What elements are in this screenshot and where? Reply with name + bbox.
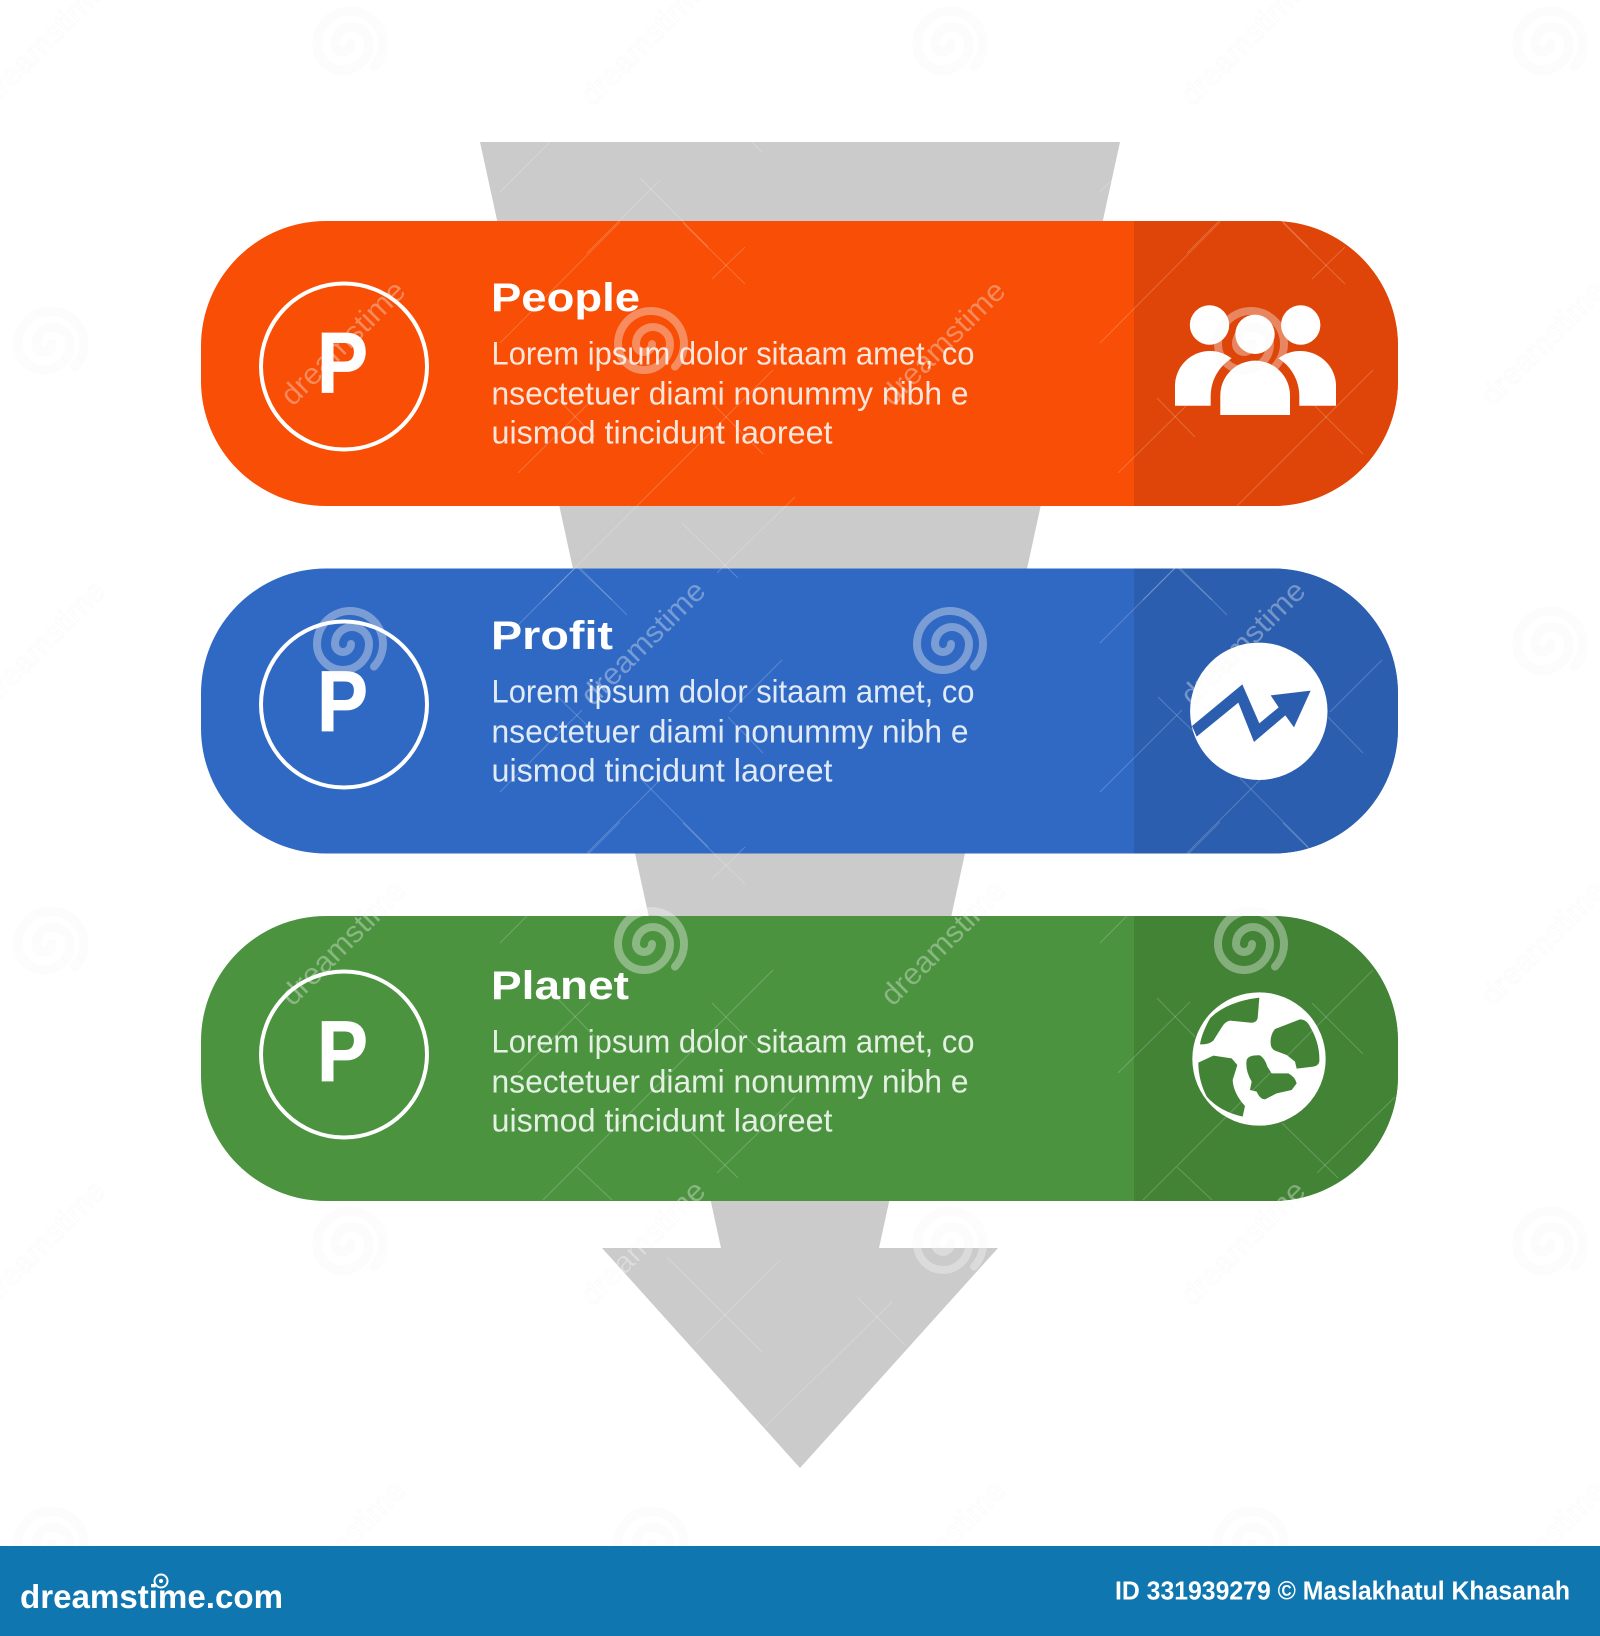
planet letter badge bbox=[261, 972, 427, 1138]
footer logo: dreamstime.com bbox=[20, 1578, 283, 1615]
panel: people bbox=[201, 221, 1398, 506]
icon: growth chart arrow bbox=[1190, 643, 1328, 780]
profit bar dark end bbox=[1134, 568, 1398, 854]
profit body text: uismod tincidunt laoreet bbox=[492, 753, 833, 789]
planet body text bbox=[492, 1024, 974, 1139]
profit body text: Lorem ipsum dolor sitaam amet, co bbox=[492, 674, 974, 710]
people bar background bbox=[201, 221, 1398, 506]
planet bar background bbox=[201, 916, 1398, 1201]
people bar dark end bbox=[1134, 221, 1398, 506]
people body text bbox=[492, 336, 974, 451]
watermark text: dreamstime bbox=[274, 874, 412, 1012]
icon: globe bbox=[1192, 992, 1326, 1126]
watermark text: dreamstime bbox=[874, 874, 1012, 1012]
profit bar background bbox=[201, 568, 1398, 854]
footer credit: ID 331939279 © Maslakhatul Khasanah bbox=[1115, 1577, 1570, 1605]
people body text: uismod tincidunt laoreet bbox=[492, 415, 833, 451]
people letter badge: P bbox=[317, 316, 368, 412]
people body text: Lorem ipsum dolor sitaam amet, co bbox=[492, 336, 974, 372]
panel: planet bbox=[201, 916, 1398, 1201]
planet body text: uismod tincidunt laoreet bbox=[492, 1103, 833, 1139]
planet body text: nsectetuer diami nonummy nibh e bbox=[492, 1064, 968, 1100]
watermark text: dreamstime bbox=[1174, 574, 1312, 712]
profit heading: Profit bbox=[491, 614, 613, 658]
icon: people group bbox=[1175, 305, 1336, 416]
people letter badge bbox=[261, 284, 427, 450]
watermark text: dreamstime bbox=[274, 1474, 412, 1612]
planet heading: Planet bbox=[491, 964, 629, 1008]
profit letter badge: P bbox=[317, 654, 368, 750]
profit letter badge bbox=[261, 622, 427, 788]
people heading: People bbox=[491, 276, 640, 320]
profit body text bbox=[492, 674, 974, 789]
footer bar bbox=[0, 1546, 1600, 1636]
watermark text: dreamstime bbox=[274, 274, 412, 412]
watermark text: dreamstime bbox=[574, 574, 712, 712]
planet body text: Lorem ipsum dolor sitaam amet, co bbox=[492, 1024, 974, 1060]
watermark text: dreamstime bbox=[1174, 1174, 1312, 1312]
watermark text: dreamstime bbox=[874, 274, 1012, 412]
profit body text: nsectetuer diami nonummy nibh e bbox=[492, 714, 968, 750]
people body text: nsectetuer diami nonummy nibh e bbox=[492, 376, 968, 412]
watermark text: dreamstime bbox=[574, 1174, 712, 1312]
planet bar dark end bbox=[1134, 916, 1398, 1201]
planet letter badge: P bbox=[317, 1004, 368, 1100]
panel: profit bbox=[201, 568, 1398, 854]
funnel arrow bbox=[480, 142, 1120, 1468]
watermark text: dreamstime bbox=[874, 1474, 1012, 1612]
